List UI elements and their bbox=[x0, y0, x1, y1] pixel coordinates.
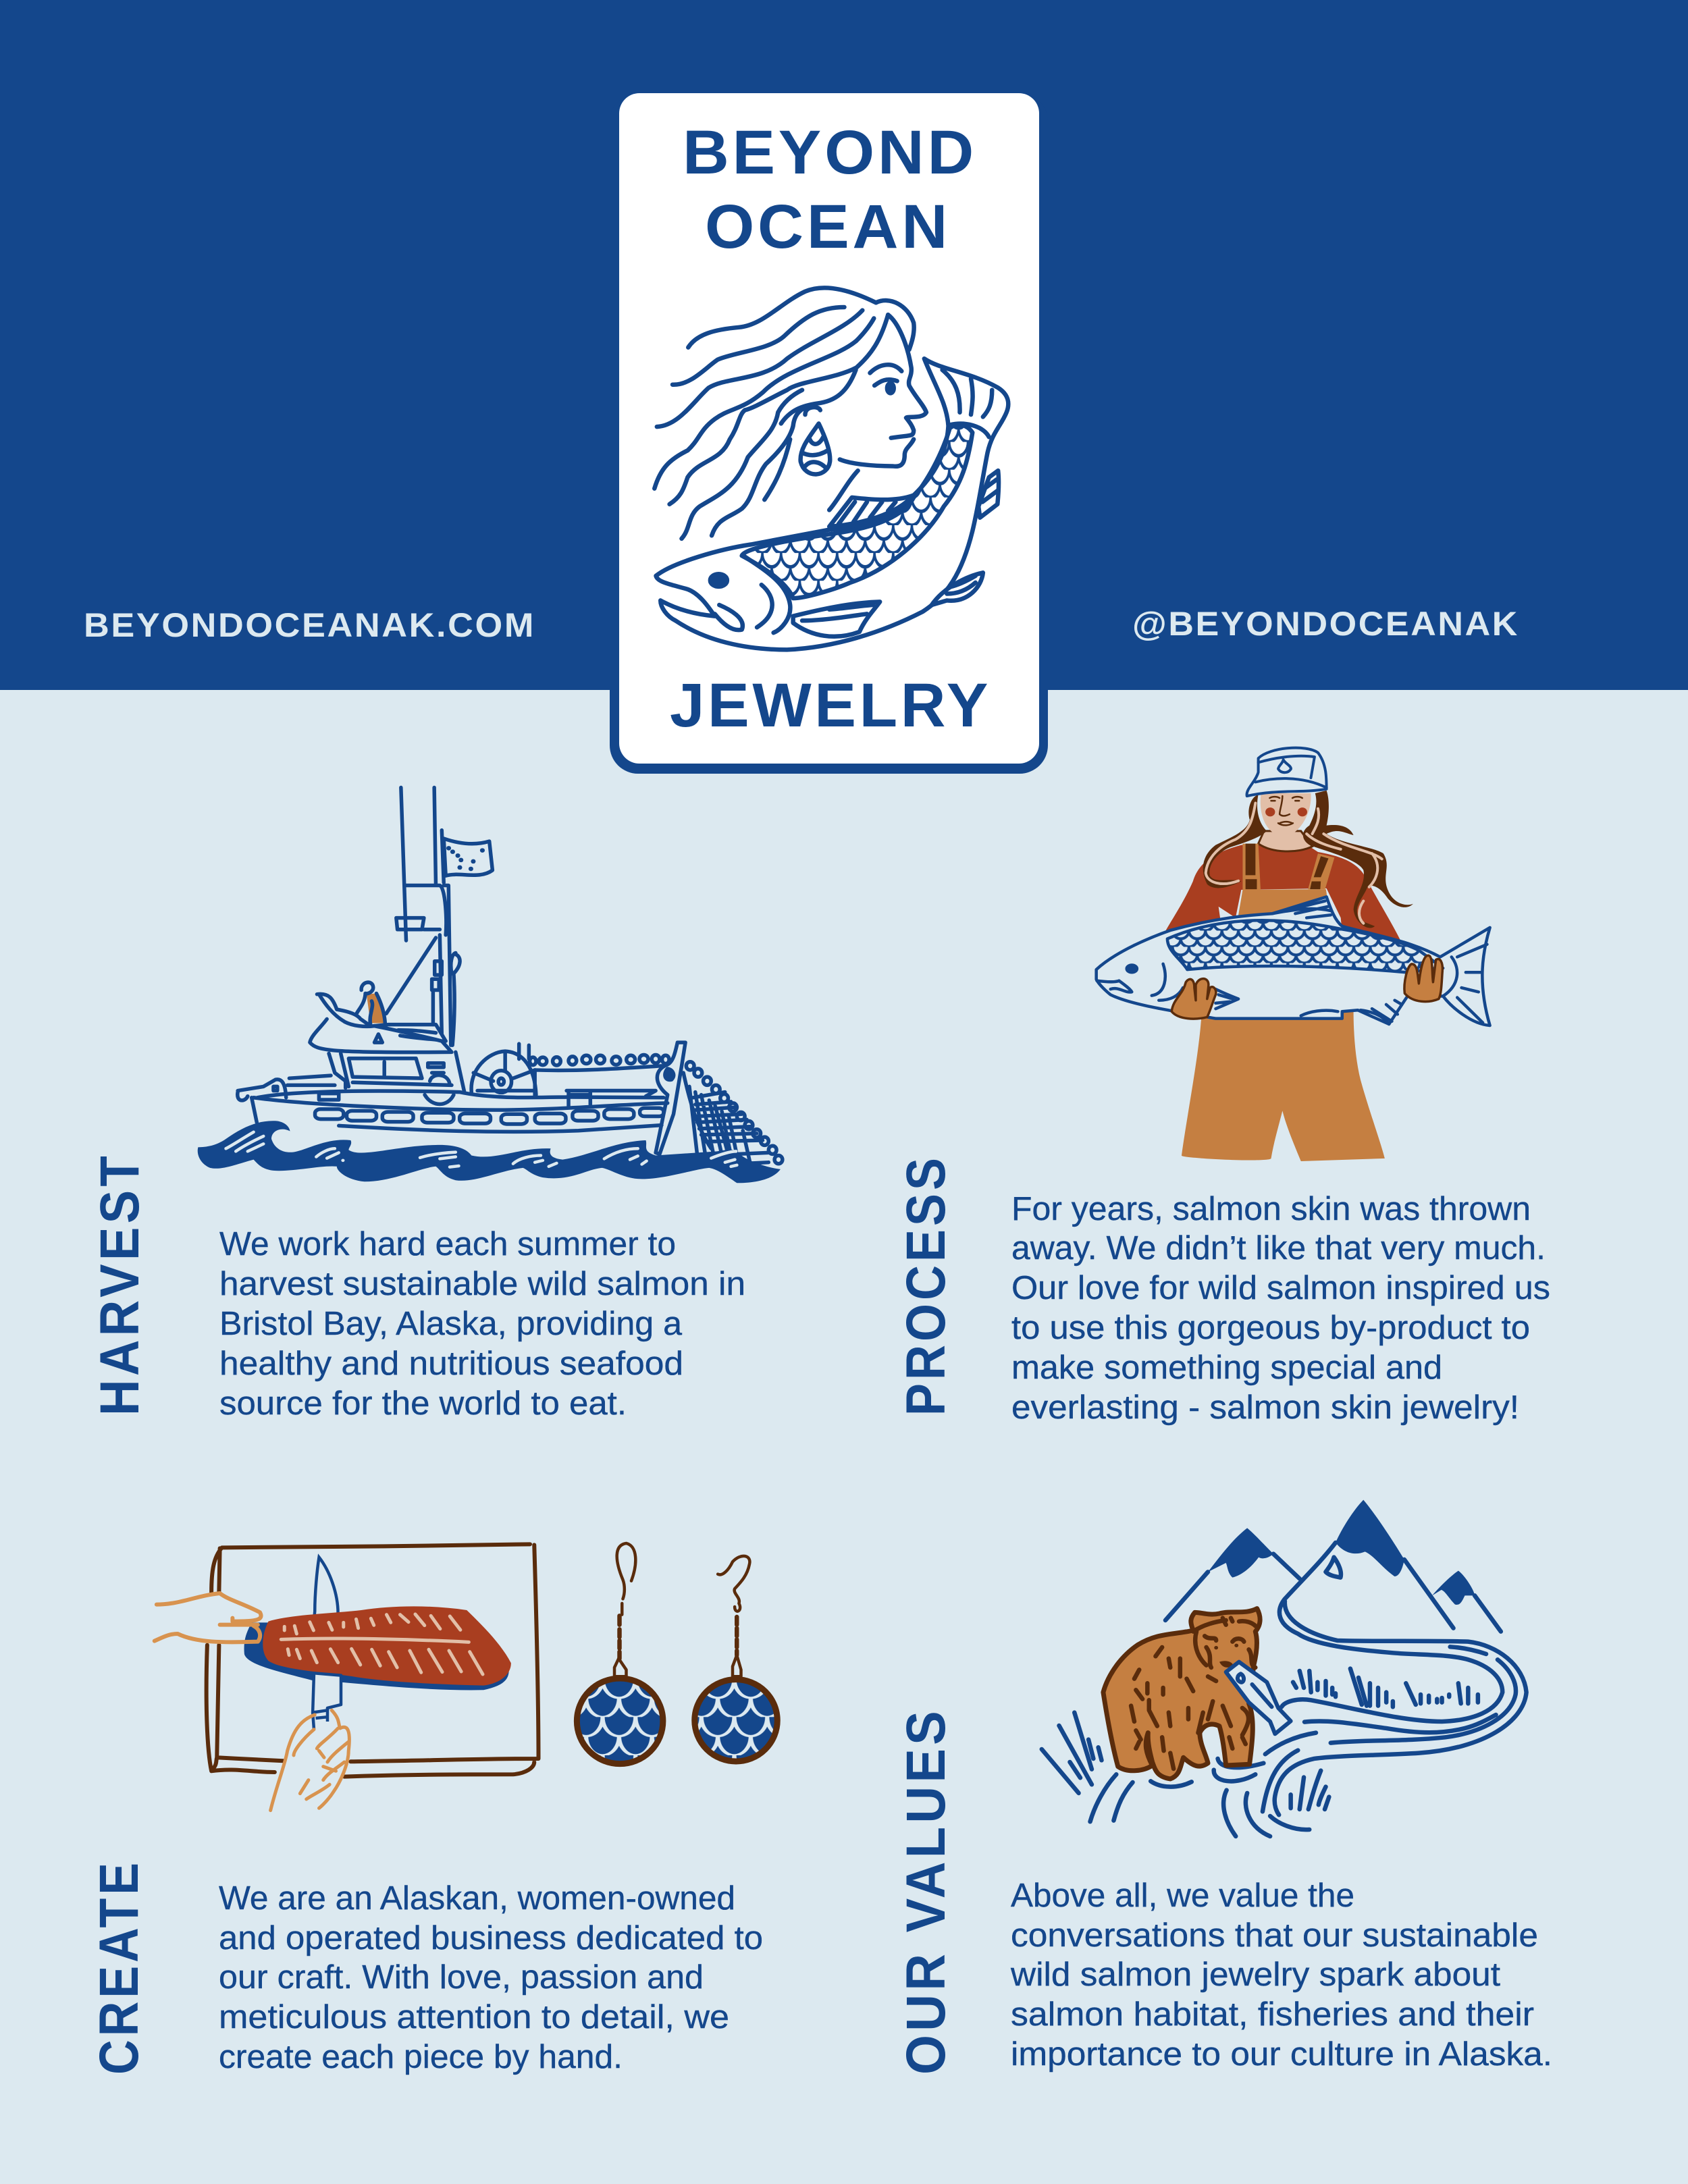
text block: create: We are an Alaskan, women-owned bbox=[219, 1880, 735, 1917]
hair highlights bbox=[1206, 803, 1382, 924]
bear fur marks bbox=[1131, 1618, 1255, 1769]
text block: harvest: harvest sustainable wild salmon in bbox=[219, 1266, 745, 1302]
pendant bbox=[577, 1678, 663, 1764]
cutting board bbox=[207, 1544, 539, 1777]
knife lower blade and handle bbox=[313, 1673, 341, 1713]
text block: harvest: We work hard each summer to bbox=[219, 1226, 676, 1262]
text block: process: to use this gorgeous by-product to bbox=[1011, 1310, 1530, 1346]
pendant loop bbox=[614, 1659, 627, 1676]
illustration: woman holding salmon bbox=[1097, 748, 1490, 1161]
heading: Harvest: HARVEST bbox=[89, 1152, 151, 1416]
chain links bbox=[617, 1616, 622, 1659]
hand holding fillet bbox=[155, 1593, 261, 1642]
text block: our values: Above all, we value the bbox=[1011, 1877, 1354, 1914]
hand holding knife bbox=[271, 1710, 349, 1811]
fisher outline bbox=[357, 982, 385, 1025]
heading: Our Values: OUR VALUES bbox=[895, 1707, 957, 2075]
logo word: Beyond: BEYOND bbox=[683, 118, 977, 187]
fish skin bbox=[244, 1622, 509, 1690]
text block: create: meticulous attention to detail, we bbox=[219, 1999, 729, 2035]
cap bbox=[1247, 748, 1327, 796]
cap body bbox=[1247, 748, 1327, 796]
text block: our values: salmon habitat, fisheries and their bbox=[1011, 1996, 1534, 2033]
pendant bbox=[695, 1680, 777, 1761]
hair right side bbox=[1303, 791, 1413, 928]
illustration: fishing boat on waves bbox=[198, 788, 783, 1183]
text block: our values: importance to our culture in Alaska. bbox=[1011, 2036, 1552, 2073]
logo inner panel bbox=[619, 93, 1039, 764]
bear body bbox=[1103, 1609, 1260, 1779]
text block: process: everlasting - salmon skin jewelry! bbox=[1011, 1389, 1519, 1426]
fisher figure bbox=[357, 982, 385, 1025]
website url: BEYONDOCEANAK.COM bbox=[84, 606, 535, 644]
text block: harvest: Bristol Bay, Alaska, providing a bbox=[219, 1306, 683, 1342]
overall straps bbox=[1242, 844, 1334, 890]
hook and chain bbox=[718, 1556, 749, 1612]
mountain snow caps bbox=[1208, 1500, 1475, 1605]
text block: create: our craft. With love, passion and bbox=[219, 1959, 704, 1996]
logo word: Ocean: OCEAN bbox=[705, 192, 951, 261]
features bbox=[1269, 796, 1302, 825]
neck bbox=[1259, 831, 1313, 851]
bear bbox=[1103, 1609, 1260, 1779]
sweater bbox=[1165, 844, 1400, 940]
knife blade bbox=[314, 1557, 338, 1620]
overalls legs bbox=[1182, 1011, 1385, 1161]
text block: our values: wild salmon jewelry spark about bbox=[1010, 1956, 1500, 1993]
text block: create bbox=[219, 1880, 763, 2075]
salmon around the woman bbox=[656, 358, 1008, 649]
skin bbox=[1261, 793, 1311, 837]
cap badge bbox=[1278, 760, 1291, 772]
hook and chain bbox=[617, 1543, 635, 1615]
salmon details bbox=[1273, 901, 1331, 917]
hands bbox=[1171, 955, 1442, 1019]
text block: process: make something special and bbox=[1011, 1350, 1442, 1386]
text block: process: For years, salmon skin was thrown bbox=[1011, 1191, 1531, 1227]
illustration: bear, mountains and river bbox=[1042, 1500, 1527, 1836]
wave foam bbox=[226, 1132, 737, 1167]
face bbox=[1261, 793, 1311, 837]
bear eyes and nose bbox=[1214, 1644, 1238, 1668]
waves bbox=[198, 1121, 781, 1183]
right hand bbox=[1404, 955, 1442, 1002]
logo border bbox=[610, 93, 1048, 774]
salmon body bbox=[1097, 897, 1490, 1026]
text block: harvest: source for the world to eat. bbox=[219, 1385, 627, 1422]
earring left bbox=[577, 1543, 663, 1764]
fish eye and line bbox=[1238, 1674, 1272, 1707]
logo card bbox=[610, 93, 1048, 774]
text block: create: and operated business dedicated to bbox=[219, 1920, 763, 1956]
hair left side bbox=[1203, 795, 1267, 888]
right strap shading bbox=[1310, 856, 1329, 889]
text block: harvest bbox=[219, 1226, 745, 1422]
stern roller and net bbox=[656, 1042, 783, 1175]
text block: process: away. We didn’t like that very much. bbox=[1011, 1230, 1546, 1267]
left hand bbox=[1171, 979, 1216, 1019]
fillet markings bbox=[281, 1614, 483, 1674]
salmon scales bbox=[1167, 920, 1443, 972]
overalls bib bbox=[1236, 889, 1331, 932]
logo word: Jewelry: JEWELRY bbox=[670, 671, 991, 740]
cap seams bbox=[1255, 756, 1327, 788]
wave mass bbox=[198, 1121, 781, 1183]
fish outline bbox=[1226, 1662, 1291, 1734]
net drum and deck gear bbox=[471, 1044, 669, 1106]
knife handle bbox=[313, 1708, 327, 1730]
left strap bbox=[1242, 844, 1261, 890]
boat hull and cabin bbox=[238, 994, 668, 1131]
text block: our values: conversations that our sustainable bbox=[1011, 1917, 1538, 1954]
heading: Create: CREATE bbox=[88, 1859, 150, 2075]
salmon bbox=[1097, 897, 1490, 1026]
hair bbox=[1203, 791, 1413, 928]
illustration: cutting board, salmon fillet and earrings bbox=[155, 1543, 777, 1811]
text block: create: create each piece by hand. bbox=[219, 2039, 623, 2075]
mast and flag bbox=[386, 788, 492, 1045]
earring right bbox=[695, 1556, 777, 1761]
text block: process: Our love for wild salmon inspired us bbox=[1011, 1270, 1550, 1306]
left strap shading bbox=[1246, 844, 1257, 889]
cheeks bbox=[1265, 807, 1307, 816]
fisher body bbox=[367, 993, 385, 1023]
logo illustration: woman and salmon bbox=[654, 288, 1008, 649]
woman hair and face bbox=[654, 288, 926, 539]
text block: our values bbox=[1010, 1877, 1552, 2073]
salmon in bear mouth bbox=[1226, 1662, 1291, 1734]
text block: process bbox=[1011, 1191, 1550, 1426]
heading: Process: PROCESS bbox=[895, 1154, 957, 1416]
grass strokes bbox=[1042, 1669, 1478, 1809]
mountain and river lines bbox=[1090, 1543, 1527, 1836]
text block: harvest: healthy and nutritious seafood bbox=[219, 1346, 683, 1382]
right strap bbox=[1308, 853, 1334, 889]
pendant loop bbox=[733, 1655, 741, 1676]
header band bbox=[0, 0, 1688, 690]
salmon fillet bbox=[263, 1606, 511, 1686]
chain links bbox=[735, 1617, 739, 1655]
social handle: @BEYONDOCEANAK bbox=[1132, 604, 1519, 643]
